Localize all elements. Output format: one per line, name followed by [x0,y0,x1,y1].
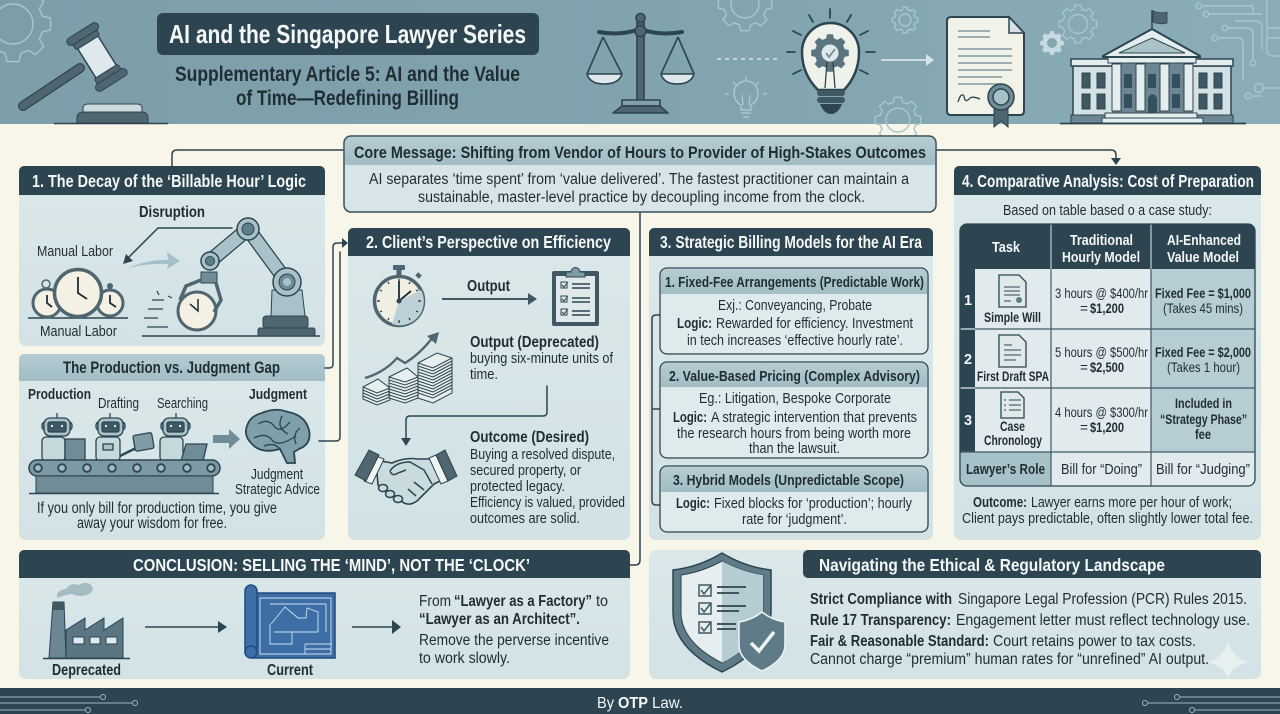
box: hybrid: Logic: [676,495,710,512]
icon: robot arm crushing clock [142,218,320,336]
judgment caption: Strategic Advice [235,482,320,498]
conclusion text: From [419,593,451,610]
outcome desired text: outcomes are solid. [470,511,580,527]
box: value-based [660,362,928,458]
box: fixed-fee: in tech increases ‘effective hourly rate’. [687,333,903,349]
box: hybrid [660,466,928,532]
arrow: factory to blueprint [145,621,227,633]
table header: Hourly Model [1062,250,1140,266]
box: value-based: than the lawsuit. [749,441,840,457]
icon: factory [43,583,130,658]
table header: Traditional [1070,233,1133,249]
dotted connector [717,58,777,60]
box: fixed-fee: Exj.: Conveyancing, Probate [718,298,872,314]
row: simple will: = [1080,301,1088,316]
ethics text [810,591,1250,668]
box: value-based: 2. Value-Based Pricing (Complex Advisory) [669,368,920,385]
panel: core message [344,136,936,212]
row: lawyer's role: Lawyer’s Role [966,461,1045,478]
icon: handshake [355,450,457,504]
icon: gavel [23,21,168,123]
disruption label and arrow: Disruption [139,204,205,221]
core text [369,171,909,206]
panel: client's perspective [348,228,630,540]
heading 2: 2. Client’s Perspective on Efficiency [366,232,611,252]
row: first draft spa: (Takes 1 hour) [1167,360,1240,375]
table header: Task [992,240,1021,256]
row: first draft spa [964,335,1251,384]
connector output to outcome [401,386,547,446]
output deprecated text: Output (Deprecated) [470,334,599,351]
ethics text: Engagement letter must reflect technology use. [956,612,1250,629]
panel: ethical and regulatory landscape [649,550,1261,679]
footer [0,688,1280,714]
conclusion text [419,593,609,667]
conclusion text: “Lawyer as a Factory” [454,593,592,610]
row: lawyer's role: Bill for “Judging” [1156,462,1250,478]
core text: sustainable, master-level practice by decoupling income from the clock. [418,189,865,206]
table header: Value Model [1167,250,1239,266]
box: fixed-fee [660,268,928,354]
subtitle: of Time—Redefining Billing [236,87,459,110]
output arrow: Output [467,278,511,295]
arrow: production to judgment [213,429,240,449]
icon: sparkle [1206,640,1250,679]
ethics text: Court retains power to tax costs. [993,633,1196,650]
deprecated label: Deprecated [52,662,121,679]
production labels: Production [28,386,91,403]
title: AI and the Singapore Lawyer Series [169,19,526,49]
ethics heading: Navigating the Ethical & Regulatory Landscape [819,555,1165,575]
gap text: If you only bill for production time, you give [37,500,277,517]
row: first draft spa: $2,500 [1090,360,1124,375]
row: case chronology: “Strategy Phase” [1160,412,1247,427]
production labels: Judgment [249,386,307,403]
row: simple will: (Takes 45 mins) [1163,301,1243,316]
box: fixed-fee: Rewarded for efficiency. Investment [716,316,913,332]
row: simple will: 1 [964,293,972,309]
icon: light bulb with gear [787,9,875,114]
header banner [0,0,1280,143]
box: value-based: Logic: [673,409,707,426]
box: hybrid: 3. Hybrid Models (Unpredictable Scope) [673,472,904,489]
outcome desired text: Buying a resolved dispute, [470,447,615,463]
outcome desired text: Efficiency is valued, provided [470,495,625,511]
disruption label and arrow [123,204,232,264]
conclusion text: “Lawyer as an Architect”. [419,611,580,628]
conclusion text: Remove the perverse incentive [419,632,609,649]
row: first draft spa: Fixed Fee = $2,000 [1155,345,1251,360]
output deprecated text [470,334,614,383]
table header: AI-Enhanced [1167,233,1241,249]
box: value-based: Eg.: Litigation, Bespoke Corporate [699,391,891,407]
arrow: bulb to document [881,54,934,66]
row: case chronology: 4 hours @ $300/hr [1055,405,1148,420]
connectors into panel 2 [319,243,344,441]
row: simple will: 3 hours @ $400/hr [1055,286,1148,301]
credit: Law. [652,695,683,712]
icon: background gears and circuits [0,0,1280,143]
gap heading: The Production vs. Judgment Gap [63,359,280,377]
arrow: blueprint to text [352,620,401,634]
row: first draft spa: 2 [964,352,972,368]
row: case chronology: fee [1195,427,1211,442]
row: case chronology: Chronology [984,433,1042,448]
icon: stopwatch [374,265,424,326]
manual labor label top: Manual Labor [37,244,113,260]
ethics heading [803,550,1261,578]
production labels: Drafting [98,396,139,412]
icon: money stacks and trend arrow [363,332,452,405]
row: simple will: Simple Will [984,310,1041,325]
box: hybrid: rate for ‘judgment’. [742,512,847,528]
table intro: Based on table based o a case study: [1003,203,1212,219]
row: case chronology: 3 [964,413,972,429]
output arrow [442,278,537,305]
heading 1: 1. The Decay of the ‘Billable Hour’ Logic [32,171,306,191]
core text: AI separates ‘time spent’ from ‘value delivered’. The fastest practitioner can maintain a [369,171,909,188]
outcome desired text: Outcome (Desired) [470,429,589,446]
row: lawyer's role: Bill for “Doing” [1061,462,1142,478]
icon: robots on conveyor [29,413,220,494]
row: first draft spa: First Draft SPA [977,369,1049,384]
row: first draft spa: 5 hours @ $500/hr [1055,345,1148,360]
row: case chronology: = [1080,420,1088,435]
panel: conclusion [19,550,630,679]
manual labor label bottom: Manual Labor [40,324,117,340]
row: case chronology: $1,200 [1090,420,1124,435]
production labels [28,386,307,412]
judgment caption [235,467,320,498]
icon: shield [673,553,785,672]
outcome text: Lawyer earns more per hour of work; [1031,495,1232,511]
current label: Current [267,662,314,679]
ethics text: Cannot charge “premium” human rates for “unrefined” AI output. [810,651,1209,668]
row: first draft spa: = [1080,360,1088,375]
gap text [37,500,277,532]
row: case chronology [964,392,1247,448]
panel: comparative analysis [954,166,1261,540]
row: case chronology: Included in [1175,396,1232,411]
core heading: Core Message: Shifting from Vendor of Hours to Provider of High-Stakes Outcomes [354,144,926,162]
icon: clocks [28,270,128,318]
credit [597,695,683,712]
box: value-based: the research hours from being worth more [677,426,911,442]
outcome desired text: protected legacy. [470,479,565,495]
outcome desired text [470,429,625,527]
panel: production vs judgment gap [19,354,325,540]
ethics text: Rule 17 Transparency: [810,612,951,629]
box: value-based: A strategic intervention that prevents [711,410,917,426]
subtitle: Supplementary Article 5: AI and the Value [175,63,520,86]
gap text: away your wisdom for free. [77,515,227,532]
icon: signed document with seal [947,17,1024,127]
box: fixed-fee: Logic: [677,315,712,332]
output deprecated text: buying six-minute units of [470,351,614,367]
table header [992,233,1241,266]
icon: scales of justice [587,14,694,113]
icon: blueprint [245,585,335,658]
conclusion text: to work slowly. [419,650,510,667]
connectors from core message [172,150,1116,565]
swoosh arrow [128,252,180,269]
credit: By [597,695,614,712]
ethics text: Strict Compliance with [810,591,952,608]
ethics text: Singapore Legal Profession (PCR) Rules 2015. [958,591,1247,608]
box: hybrid: Fixed blocks for ‘production’; hourly [714,496,913,512]
outcome desired text: secured property, or [470,463,581,479]
ethics text: Fair & Reasonable Standard: [810,633,989,650]
conclusion text: to [596,593,608,610]
panel: decay of the billable hour [19,166,325,346]
conclusion heading: CONCLUSION: SELLING THE ‘MIND’, NOT THE ‘CLOCK’ [133,555,530,575]
panel: strategic billing models [649,228,933,540]
credit: OTP [618,695,648,712]
row: simple will [964,275,1251,325]
icon: small light bulb [725,76,767,117]
output deprecated text: time. [470,367,498,383]
box: fixed-fee: 1. Fixed-Fee Arrangements (Predictable Work) [665,274,924,291]
icon: brain [246,410,310,463]
title [157,13,539,55]
icon: courthouse [1060,10,1246,124]
production labels: Searching [157,396,208,412]
outcome text [962,494,1253,527]
row: case chronology: Case [1000,419,1025,434]
subtitle [175,63,520,110]
row: simple will: $1,200 [1090,301,1124,316]
outcome text: Outcome: [973,494,1027,511]
icon: clipboard [552,268,599,326]
circuit decoration [0,694,1280,712]
row: simple will: Fixed Fee = $1,000 [1155,286,1251,301]
bracket [652,315,660,505]
comparison table [960,224,1255,486]
row: lawyer's role [966,461,1250,478]
judgment caption: Judgment [251,467,303,483]
heading 3: 3. Strategic Billing Models for the AI Era [660,232,922,252]
